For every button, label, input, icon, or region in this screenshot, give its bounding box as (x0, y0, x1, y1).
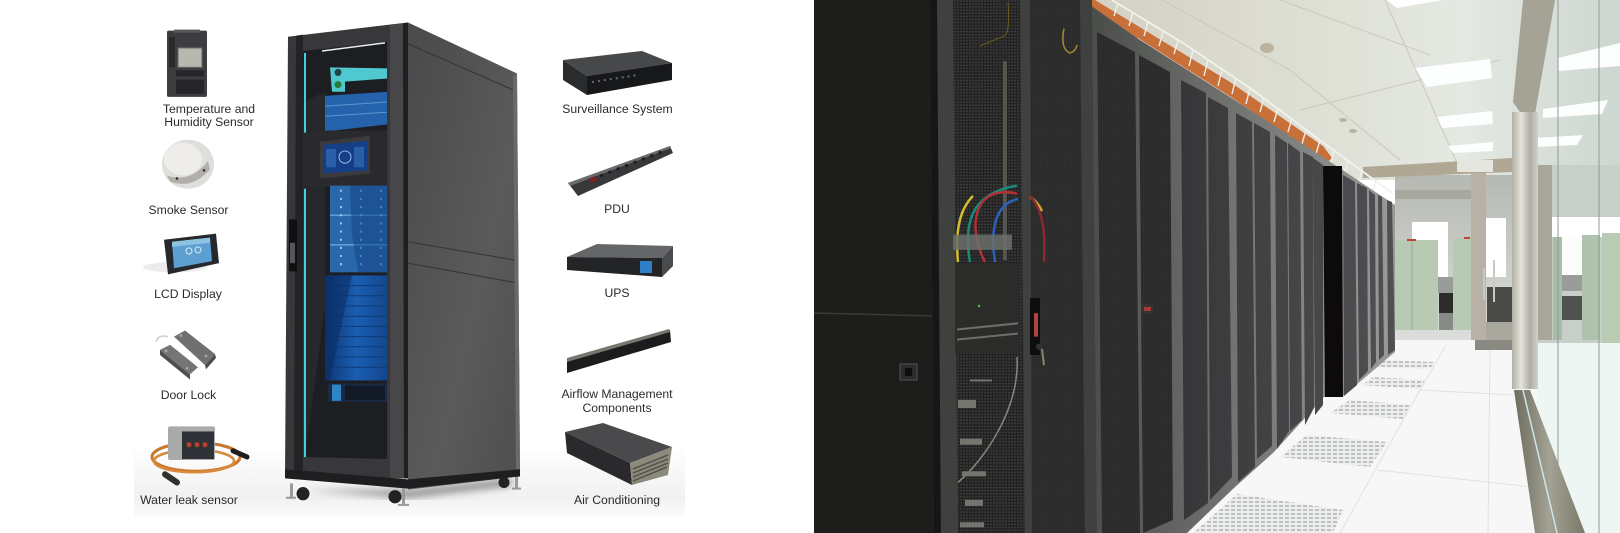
light bar (322, 43, 385, 51)
cable tray (1080, 0, 1395, 205)
door frame (930, 0, 1097, 533)
panel: component overview (134, 22, 685, 516)
label: temperature and humidity sensor: Humidity Sensor (164, 115, 254, 129)
mesh panels (953, 0, 1025, 533)
ceiling (1080, 0, 1620, 180)
cabinet floor shadow (305, 478, 512, 498)
cyan LED strip (304, 53, 306, 457)
label: LCD display: LCD Display (154, 287, 223, 301)
smoke detectors (1260, 43, 1357, 133)
icon: airflow management component (567, 329, 671, 373)
legs (286, 475, 521, 506)
base (285, 469, 520, 489)
steel floor track (1514, 390, 1585, 533)
icon: water leak sensor (152, 426, 247, 482)
cabinet front door (285, 22, 408, 478)
icon: surveillance system (563, 51, 672, 95)
upper rack gear (330, 67, 387, 92)
icon: LCD display (143, 234, 219, 274)
front cabinet door (930, 0, 1097, 533)
back room (1363, 158, 1515, 340)
open black door (1323, 166, 1343, 397)
glass wall reflection (1537, 0, 1620, 533)
steel column and beam (1512, 0, 1555, 389)
interior post (1003, 61, 1007, 260)
ceiling lights (1387, 0, 1620, 153)
icon: UPS (567, 244, 673, 277)
back room cabinets (1395, 238, 1471, 330)
steel column, back (1471, 173, 1486, 340)
door middle band (303, 131, 387, 187)
floor (1172, 340, 1620, 533)
illustration: server cabinet (285, 22, 521, 506)
floor vents (1193, 360, 1435, 533)
label: door lock: Door Lock (161, 388, 217, 402)
yellow loops (1063, 29, 1077, 53)
equipment shelf (955, 263, 1020, 353)
network cables (957, 186, 1044, 262)
icon: PDU (568, 146, 673, 196)
backdrop of product image (134, 445, 685, 516)
cabinet frames (1083, 0, 1395, 533)
door lock handle (1030, 298, 1044, 365)
label: airflow management components: Airflow Management (561, 387, 673, 401)
icon: air conditioning (565, 423, 672, 485)
cable bracket (953, 235, 1012, 250)
label: airflow management components: Components (582, 401, 652, 415)
cabinet row (1083, 0, 1395, 533)
glass (303, 42, 387, 459)
server units (330, 186, 387, 272)
mesh doors (1097, 32, 1173, 533)
door handle lock (289, 219, 297, 271)
cabinet side panel (408, 22, 520, 490)
badge: door lock handle (1142, 304, 1153, 314)
touch screen (320, 136, 370, 178)
blade stack (325, 275, 387, 380)
casters (296, 477, 510, 503)
label: air conditioning: Air Conditioning (574, 493, 660, 507)
floor seams (1340, 347, 1533, 533)
door handles (1484, 260, 1494, 302)
lower cables (958, 357, 1017, 482)
left cabinet side panel (814, 0, 942, 533)
label: temperature and humidity sensor: Temperature and (163, 102, 255, 116)
label: surveillance system: Surveillance System (562, 102, 673, 116)
icon: temperature and humidity sensor (167, 30, 207, 97)
label: UPS: UPS (604, 286, 630, 300)
bottom unit (328, 384, 387, 402)
label: PDU: PDU (604, 202, 630, 216)
icon: door lock (156, 330, 216, 379)
icon: smoke sensor (162, 140, 214, 189)
label: smoke sensor: Smoke Sensor (149, 203, 228, 217)
panel: data center aisle photo (814, 0, 1620, 533)
label: water leak sensor: Water leak sensor (140, 493, 238, 507)
